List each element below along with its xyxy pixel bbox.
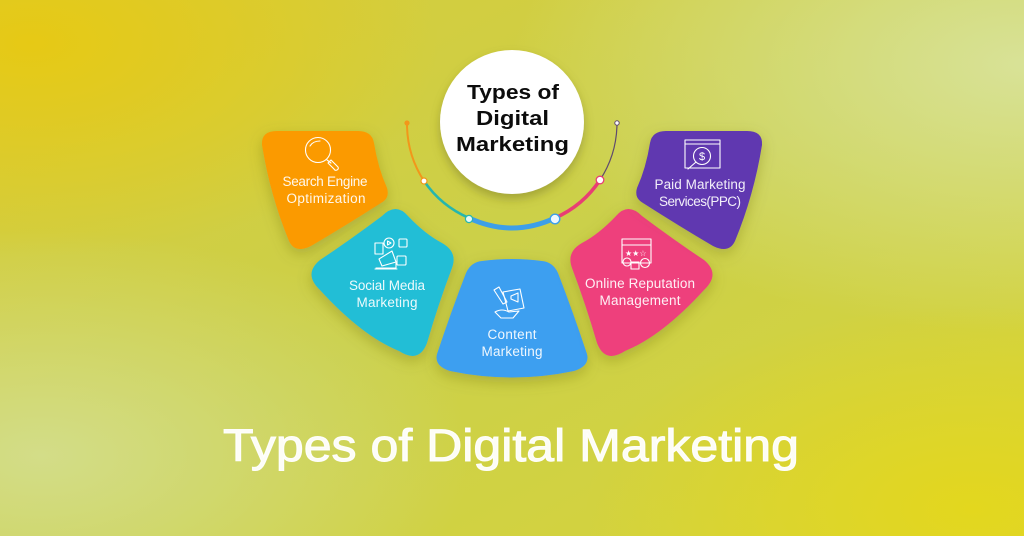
panel: Content Marketing xyxy=(437,259,587,378)
panel: Search Engine Optimization xyxy=(262,131,388,249)
panel: Online Reputation Management xyxy=(570,209,712,356)
icon: reviews browser xyxy=(622,239,651,269)
arc nodes xyxy=(404,120,619,224)
arc segment: orange xyxy=(407,123,424,181)
label xyxy=(654,177,746,209)
label: Services(PPC) xyxy=(659,194,741,209)
label xyxy=(482,327,542,359)
centre heading xyxy=(456,81,569,156)
label: Online Reputation xyxy=(585,276,695,291)
arc segment: teal xyxy=(424,181,469,218)
label: Marketing xyxy=(356,295,418,310)
arc segment: blue xyxy=(469,218,555,228)
arc segment: purple xyxy=(600,123,617,180)
arc segment: pink xyxy=(555,180,600,218)
label: Optimization xyxy=(286,191,366,206)
arc connector xyxy=(404,120,619,228)
label xyxy=(349,278,425,310)
centre heading: Types of xyxy=(467,81,559,104)
panel: Paid Marketing Services (PPC) xyxy=(636,131,762,249)
icon: social media megaphone xyxy=(375,238,407,269)
label: Content xyxy=(488,327,537,342)
label: Search Engine xyxy=(282,174,368,189)
icon: reviews browser: ★★☆ xyxy=(625,249,647,258)
centre heading: Digital xyxy=(476,107,549,130)
icon: document and hand xyxy=(494,287,524,318)
label: Paid Marketing xyxy=(654,177,746,192)
icon: browser with dollar magnifier: $ xyxy=(699,151,705,163)
main title: Types of Digital Marketing xyxy=(223,420,799,471)
panel: Social Media Marketing xyxy=(312,209,454,356)
label xyxy=(282,174,368,206)
centre heading: Marketing xyxy=(456,133,569,156)
label: Management xyxy=(600,293,681,308)
label xyxy=(585,276,695,308)
label: Marketing xyxy=(482,344,542,359)
centre circle with heading xyxy=(440,50,584,194)
label: Social Media xyxy=(349,278,425,293)
icon: magnifying glass xyxy=(306,138,338,170)
